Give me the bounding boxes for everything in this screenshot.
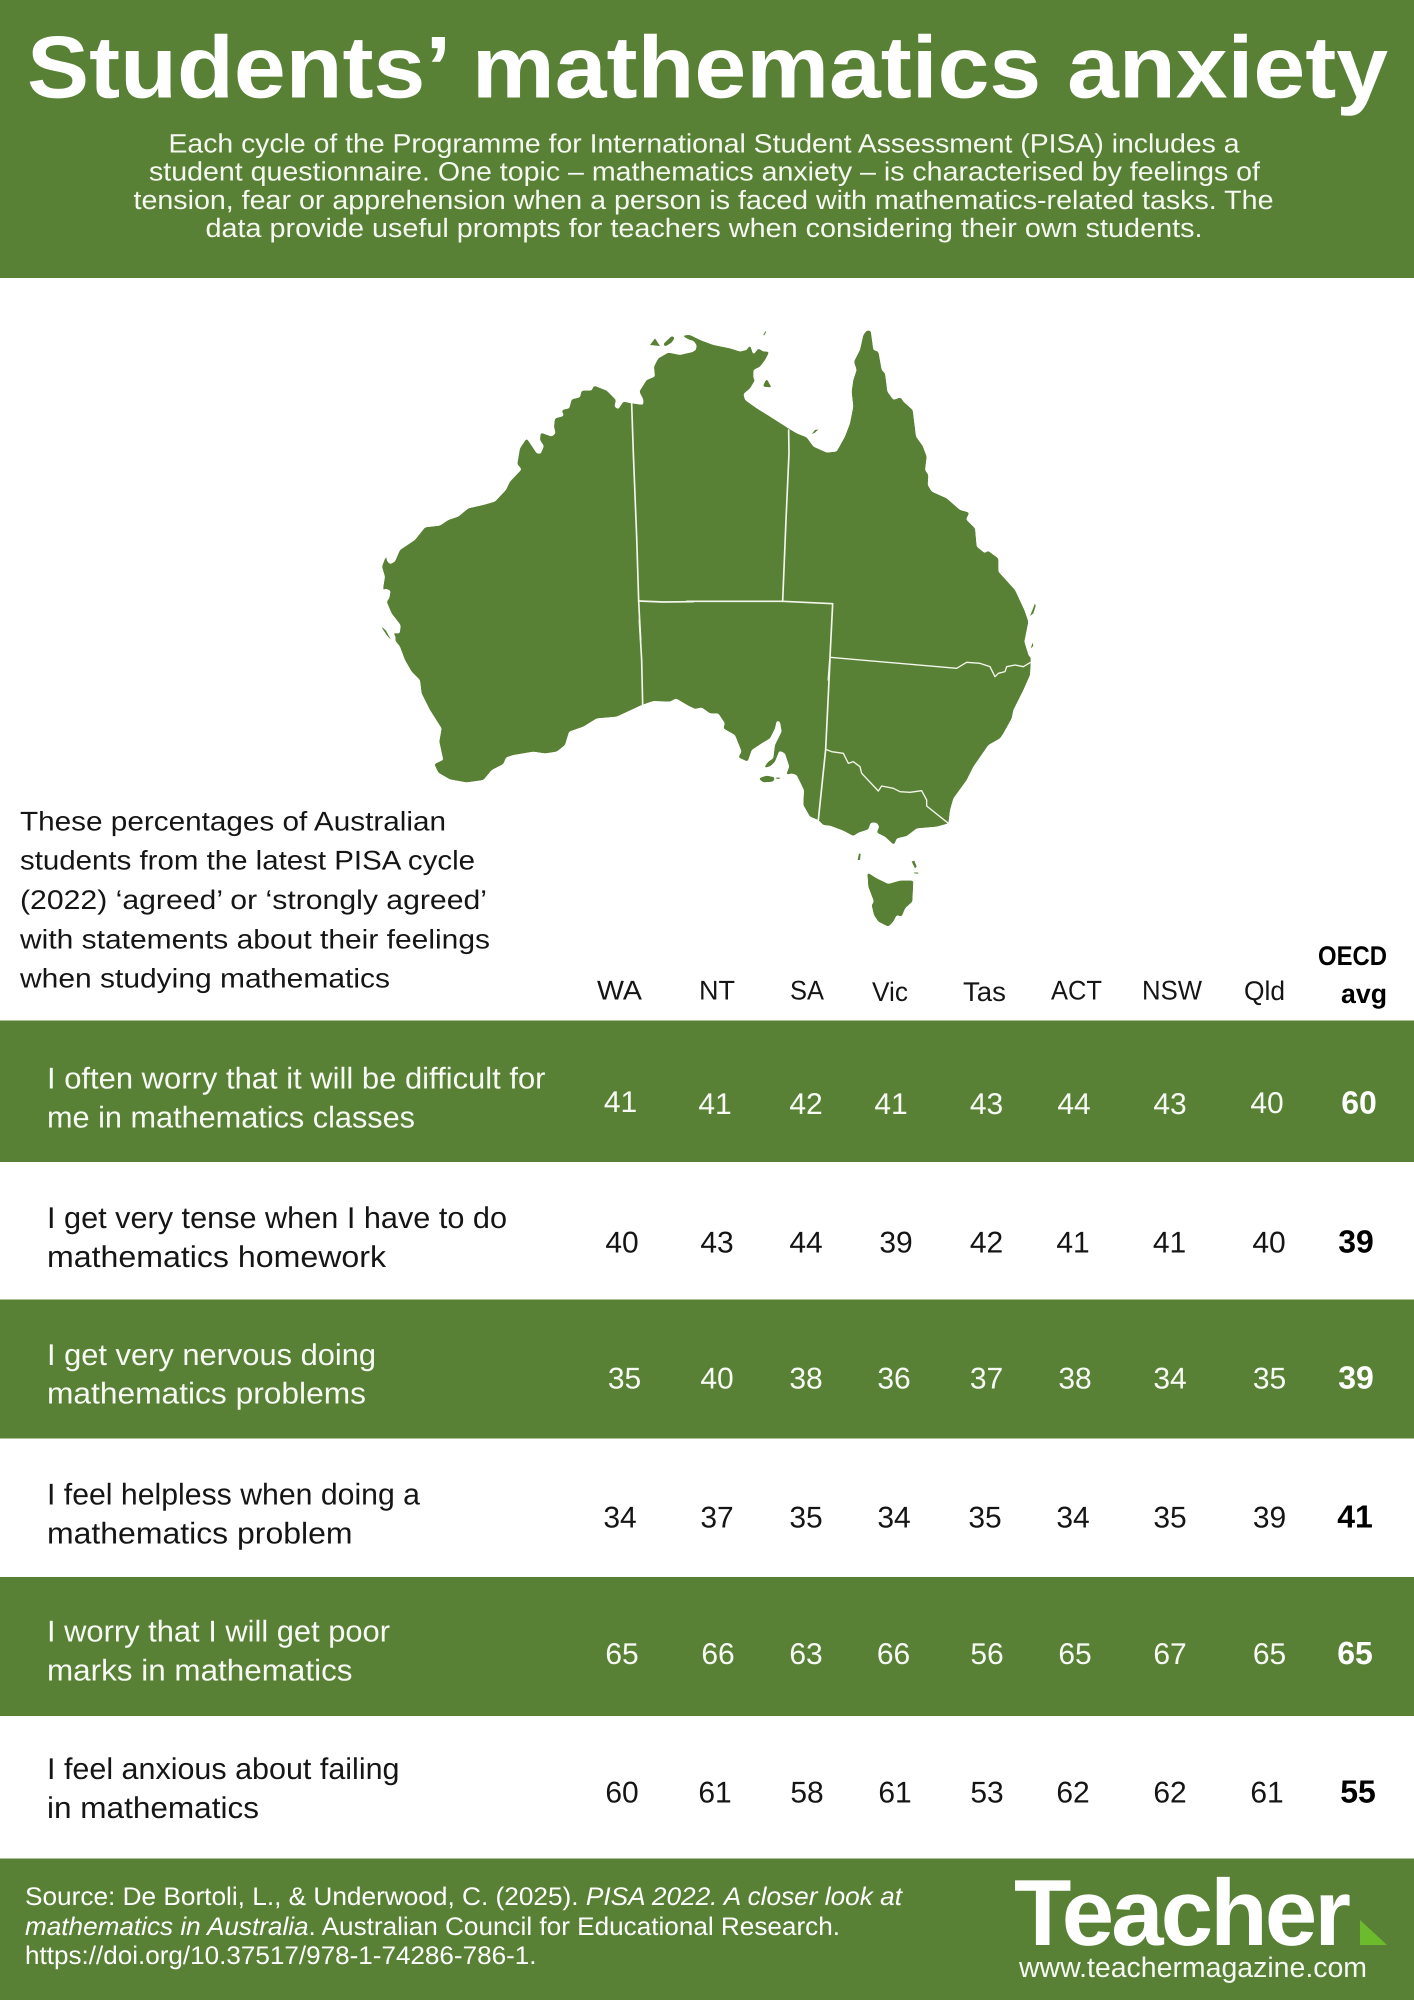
table row 3: mathematics problems bbox=[47, 1378, 366, 1410]
table row 1: 40 bbox=[1250, 1087, 1284, 1120]
table row 4: 34 bbox=[603, 1502, 637, 1534]
table row 4: 35 bbox=[789, 1502, 823, 1534]
table column headers: SA bbox=[790, 976, 824, 1006]
table row 2: 40 bbox=[605, 1226, 639, 1260]
table row 5: marks in mathematics bbox=[47, 1654, 352, 1688]
table row 3: 39 bbox=[1338, 1360, 1374, 1396]
table column headers: avg bbox=[1341, 979, 1387, 1009]
table row 4: mathematics problem bbox=[47, 1518, 352, 1550]
table row 3: 34 bbox=[1153, 1362, 1187, 1396]
table row 5: I worry that I will get poor bbox=[47, 1616, 390, 1648]
table row 4: 41 bbox=[1337, 1498, 1373, 1534]
panel: header bbox=[0, 0, 1414, 278]
table row 6: 61 bbox=[698, 1776, 732, 1810]
table row 1: I often worry that it will be difficult for bbox=[47, 1062, 546, 1096]
source citation: https://doi.org/10.37517/978-1-74286-786-1. bbox=[25, 1942, 536, 1970]
table row 3: 35 bbox=[608, 1362, 641, 1396]
table row 6: 61 bbox=[1250, 1776, 1284, 1810]
table row 2: 41 bbox=[1056, 1226, 1090, 1260]
table row 4: 39 bbox=[1253, 1502, 1286, 1534]
source citation bbox=[25, 1883, 903, 1970]
intro text: data provide useful prompts for teachers when considering their own students. bbox=[206, 213, 1202, 243]
table row 6: 62 bbox=[1153, 1776, 1187, 1810]
table row 1: 42 bbox=[789, 1088, 823, 1121]
table row 1: 41 bbox=[698, 1088, 732, 1121]
table row 1: 44 bbox=[1057, 1088, 1091, 1121]
intro text: Each cycle of the Programme for International Student Assessment (PISA) includes a bbox=[168, 128, 1240, 158]
table column headers: ACT bbox=[1051, 976, 1102, 1006]
table column headers: WA bbox=[597, 976, 642, 1006]
table row 4: 34 bbox=[877, 1502, 911, 1534]
table row 1: 43 bbox=[1153, 1088, 1187, 1121]
table row 3: 40 bbox=[700, 1362, 734, 1396]
table row 4: 35 bbox=[968, 1502, 1002, 1534]
explanatory note: with statements about their feelings bbox=[19, 924, 490, 954]
table column headers: OECD bbox=[1318, 941, 1387, 971]
table row 1: me in mathematics classes bbox=[47, 1102, 415, 1134]
panel: footer bbox=[0, 1858, 1414, 2000]
table row 6: 55 bbox=[1340, 1774, 1376, 1810]
table row 6: I feel anxious about failing bbox=[47, 1753, 400, 1786]
explanatory note: (2022) ‘agreed’ or ‘strongly agreed’ bbox=[20, 885, 487, 915]
table row 6 bbox=[47, 1753, 1376, 1825]
source citation: Source: De Bortoli, L., & Underwood, C. (2025). PISA 2022. A closer look at bbox=[25, 1883, 903, 1911]
table row 5: 63 bbox=[789, 1638, 823, 1671]
table row 5: 65 bbox=[1253, 1638, 1286, 1671]
table row 1: 60 bbox=[1341, 1084, 1377, 1120]
table row 3 bbox=[0, 1300, 1414, 1438]
table row 6: in mathematics bbox=[47, 1792, 259, 1825]
table row 1: 43 bbox=[970, 1088, 1003, 1121]
table row 2: 42 bbox=[970, 1226, 1003, 1260]
table row 6: 58 bbox=[790, 1776, 824, 1810]
table row 6: 62 bbox=[1056, 1776, 1090, 1810]
table row 2: 40 bbox=[1252, 1226, 1286, 1260]
table row 5 bbox=[0, 1577, 1414, 1716]
table row 2: 41 bbox=[1153, 1226, 1186, 1260]
table row 1 bbox=[0, 1020, 1414, 1162]
table row 2: I get very tense when I have to do bbox=[47, 1202, 507, 1235]
table row 2: mathematics homework bbox=[47, 1241, 387, 1274]
table column headers: Qld bbox=[1244, 976, 1285, 1006]
Teacher logo: www.teachermagazine.com bbox=[1018, 1951, 1367, 1983]
table column headers: NT bbox=[699, 976, 735, 1006]
table row 6: 60 bbox=[605, 1776, 639, 1810]
explanatory note: These percentages of Australian bbox=[20, 806, 446, 836]
table row 6: 53 bbox=[970, 1776, 1004, 1810]
Teacher logo: Teacher bbox=[1014, 1860, 1351, 1965]
explanatory note bbox=[19, 806, 490, 994]
table row 2: 43 bbox=[700, 1226, 734, 1260]
intro text: student questionnaire. One topic – mathematics anxiety – is characterised by feelings of bbox=[149, 156, 1261, 186]
explanatory note: students from the latest PISA cycle bbox=[20, 846, 475, 876]
table row 5: 65 bbox=[1058, 1638, 1092, 1671]
icon: Tasmania bbox=[867, 872, 913, 927]
table column headers: Vic bbox=[872, 977, 908, 1007]
table row 3: I get very nervous doing bbox=[47, 1339, 376, 1372]
intro text: tension, fear or apprehension when a person is faced with mathematics-related tasks. The bbox=[134, 185, 1274, 215]
explanatory note: when studying mathematics bbox=[19, 964, 390, 994]
table row 2: 39 bbox=[879, 1226, 913, 1260]
map of Australia bbox=[382, 331, 1036, 927]
title: Students’ mathematics anxiety bbox=[27, 18, 1388, 116]
table row 3: 38 bbox=[1058, 1362, 1092, 1396]
table row 5: 66 bbox=[701, 1638, 735, 1671]
state borders bbox=[632, 403, 1030, 823]
table row 4: 34 bbox=[1056, 1502, 1090, 1534]
table row 3: 36 bbox=[877, 1362, 911, 1396]
table row 2 bbox=[47, 1202, 1374, 1274]
table row 6: 61 bbox=[878, 1776, 912, 1810]
table row 3: 38 bbox=[789, 1362, 823, 1396]
table row 5: 65 bbox=[605, 1638, 639, 1671]
table row 4: 37 bbox=[700, 1502, 734, 1534]
table row 4 bbox=[47, 1478, 1373, 1550]
table row 4: 35 bbox=[1153, 1502, 1187, 1534]
table column headers: NSW bbox=[1142, 976, 1202, 1006]
table column headers bbox=[597, 941, 1387, 1009]
small islands bbox=[382, 331, 1036, 874]
table row 5: 67 bbox=[1153, 1638, 1187, 1671]
intro text bbox=[134, 128, 1274, 243]
table row 5: 65 bbox=[1337, 1635, 1373, 1671]
table row 3: 35 bbox=[1253, 1362, 1286, 1396]
table row 1: 41 bbox=[604, 1086, 637, 1119]
source citation: mathematics in Australia . Australian Council for Educational Research. bbox=[25, 1913, 840, 1941]
table row 5: 56 bbox=[970, 1638, 1004, 1671]
table row 4: I feel helpless when doing a bbox=[47, 1478, 420, 1512]
table row 3: 37 bbox=[970, 1362, 1003, 1396]
table column headers: Tas bbox=[963, 977, 1006, 1007]
table row 5: 66 bbox=[877, 1638, 910, 1671]
table row 1: 41 bbox=[874, 1088, 908, 1121]
table row 2: 44 bbox=[789, 1226, 823, 1260]
table row 2: 39 bbox=[1338, 1224, 1374, 1260]
